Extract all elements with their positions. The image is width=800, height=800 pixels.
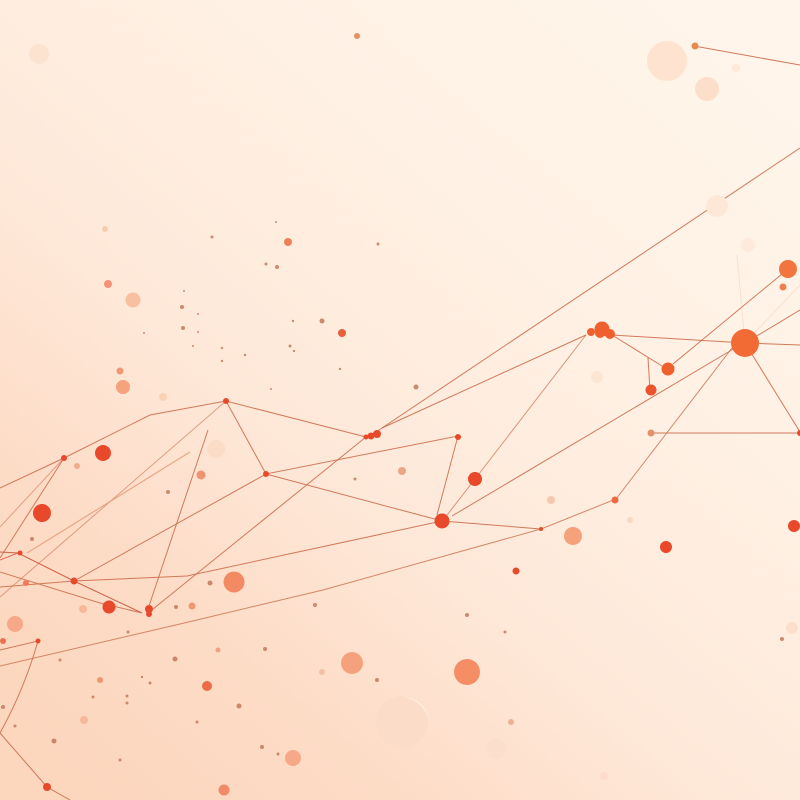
- scattered small dots: [0, 221, 784, 780]
